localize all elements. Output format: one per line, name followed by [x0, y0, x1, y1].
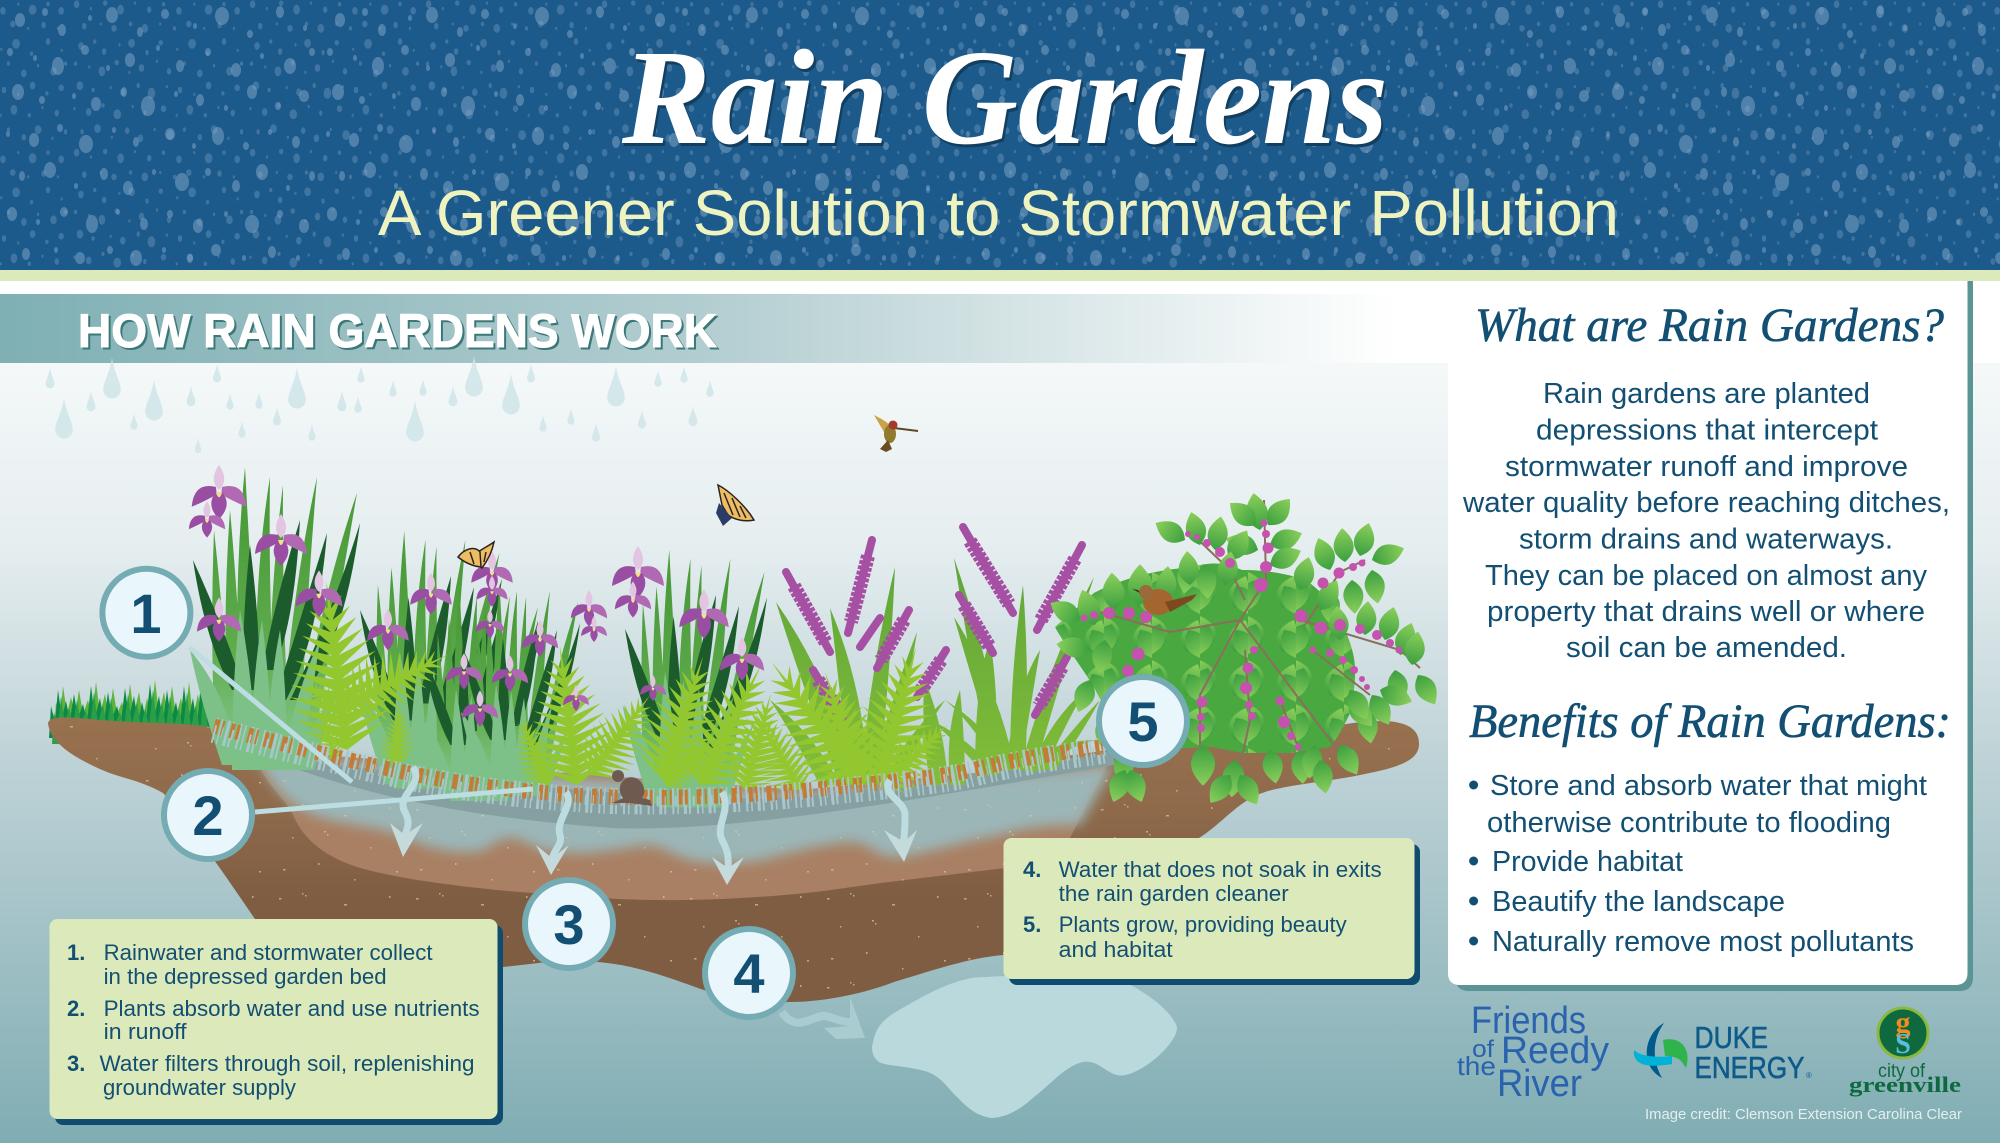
definition text: property that drains well or where — [1487, 596, 1925, 628]
badge 2 — [164, 771, 252, 859]
soil speckles — [48, 717, 1419, 1002]
badge 5: 5 — [1127, 690, 1159, 753]
image credit: Image credit: Clemson Extension Carolina Clear — [1645, 1106, 1962, 1123]
badge 3: 3 — [553, 893, 585, 956]
logo: friends of the reedy river — [1457, 1000, 1609, 1105]
callout: steps 1 to 3 — [50, 919, 503, 1125]
logo: friends of the reedy river: Friends — [1471, 1000, 1586, 1042]
logo: friends of the reedy river: River — [1497, 1063, 1582, 1105]
callout: steps 1 to 3: groundwater supply — [103, 1075, 296, 1100]
leader line 1 — [189, 647, 352, 782]
badge 3 — [525, 880, 613, 968]
logo: city of greenville: S — [1895, 1029, 1911, 1060]
callout: steps 1 to 3: 3. — [67, 1051, 85, 1076]
callout: steps 1 to 3: Water filters through soil, replenishing — [100, 1051, 474, 1076]
logo: city of greenville: g — [1896, 1006, 1910, 1039]
callout: steps 1 to 3: in runoff — [104, 1019, 188, 1044]
ponding water band — [258, 750, 1114, 828]
benefits list: Store and absorb water that might — [1490, 770, 1927, 802]
callout: steps 1 to 3: Rainwater and stormwater collect — [104, 940, 433, 965]
section heading band — [0, 294, 1397, 363]
section heading: HOW RAIN GARDENS WORK — [78, 304, 717, 357]
definition text: soil can be amended. — [1566, 632, 1847, 664]
benefits list: Naturally remove most pollutants — [1492, 926, 1914, 958]
ferns — [276, 575, 966, 809]
outflow arrow — [782, 997, 865, 1039]
callout: steps 1 to 3: in the depressed garden bed — [104, 964, 387, 989]
badge 1 — [102, 569, 190, 657]
panel: what are rain gardens and benefits — [1448, 281, 1973, 991]
rain drops — [46, 356, 714, 453]
benefits list: otherwise contribute to flooding — [1487, 807, 1891, 839]
logo: friends of the reedy river: of — [1472, 1036, 1494, 1063]
subtitle: A Greener Solution to Stormwater Pollution — [378, 177, 1619, 249]
callout: steps 4 and 5: 5. — [1023, 912, 1041, 937]
callout: steps 1 to 3: 2. — [67, 996, 85, 1021]
logo: duke energy: DUKE — [1694, 1020, 1768, 1055]
butterfly upper — [716, 485, 754, 526]
callout: steps 4 and 5: the rain garden cleaner — [1059, 881, 1289, 906]
leader line 2 — [255, 789, 533, 812]
callout: steps 1 to 3: 1. — [67, 940, 85, 965]
badge 4 — [705, 929, 793, 1017]
iris flowers — [189, 465, 764, 727]
callout: steps 4 and 5: and habitat — [1059, 937, 1173, 962]
title: Rain Gardens — [621, 23, 1388, 173]
heading: what are rain gardens: What are Rain Gardens? — [1475, 299, 1944, 352]
benefits list: Beautify the landscape — [1492, 886, 1785, 918]
logo: friends of the reedy river: Reedy — [1501, 1030, 1609, 1072]
logo: city of greenville: greenville — [1849, 1072, 1961, 1097]
logo: duke energy — [1634, 1020, 1812, 1085]
amended soil layer — [250, 750, 1110, 900]
badge 5 — [1099, 677, 1187, 765]
water saturated layer — [255, 755, 1114, 863]
beautyberry shrub — [1046, 491, 1444, 809]
definition text: stormwater runoff and improve — [1505, 451, 1908, 483]
benefits list: Provide habitat — [1492, 846, 1683, 878]
heading: benefits: Benefits of Rain Gardens: — [1469, 695, 1951, 748]
background gradient — [0, 281, 2000, 1143]
logo: duke energy: ENERGY — [1694, 1050, 1804, 1085]
logo: city of greenville — [1849, 1006, 1961, 1097]
mulch layer — [214, 726, 1109, 801]
soil cross-section — [48, 717, 1419, 1002]
hummingbird — [874, 415, 918, 452]
header banner — [0, 0, 2000, 270]
definition text: storm drains and waterways. — [1519, 524, 1893, 556]
logo: city of greenville: city of — [1878, 1061, 1926, 1082]
iris plants — [190, 467, 767, 808]
definition text: Rain gardens are planted — [1543, 378, 1870, 410]
butterfly lower — [458, 542, 494, 568]
definition text — [1462, 378, 1950, 664]
callout: steps 4 and 5: Plants grow, providing beauty — [1059, 912, 1347, 937]
header accent stripe — [0, 270, 2000, 281]
callout: steps 1 to 3: Plants absorb water and use nutrients — [104, 996, 480, 1021]
definition text: They can be placed on almost any — [1485, 560, 1928, 592]
logo: duke energy: ® — [1806, 1071, 1812, 1080]
definition text: depressions that intercept — [1536, 414, 1878, 446]
badge 2: 2 — [192, 784, 224, 847]
wren — [1132, 585, 1197, 615]
blazing star plants — [770, 527, 1100, 785]
badge 1: 1 — [130, 582, 162, 645]
badge 4: 4 — [733, 942, 765, 1005]
pond — [872, 974, 1177, 1118]
benefits list — [1469, 770, 1927, 958]
frog — [612, 770, 652, 807]
callout: steps 4 and 5: 4. — [1023, 857, 1041, 882]
logo: friends of the reedy river: the — [1457, 1051, 1496, 1081]
definition text: water quality before reaching ditches, — [1462, 487, 1950, 519]
callout: steps 4 and 5 — [1004, 838, 1420, 985]
infiltration arrows — [390, 767, 917, 885]
callout: steps 4 and 5: Water that does not soak in exits — [1059, 857, 1382, 882]
lawn grass — [49, 678, 253, 754]
white strip behind section heading — [0, 281, 2000, 363]
